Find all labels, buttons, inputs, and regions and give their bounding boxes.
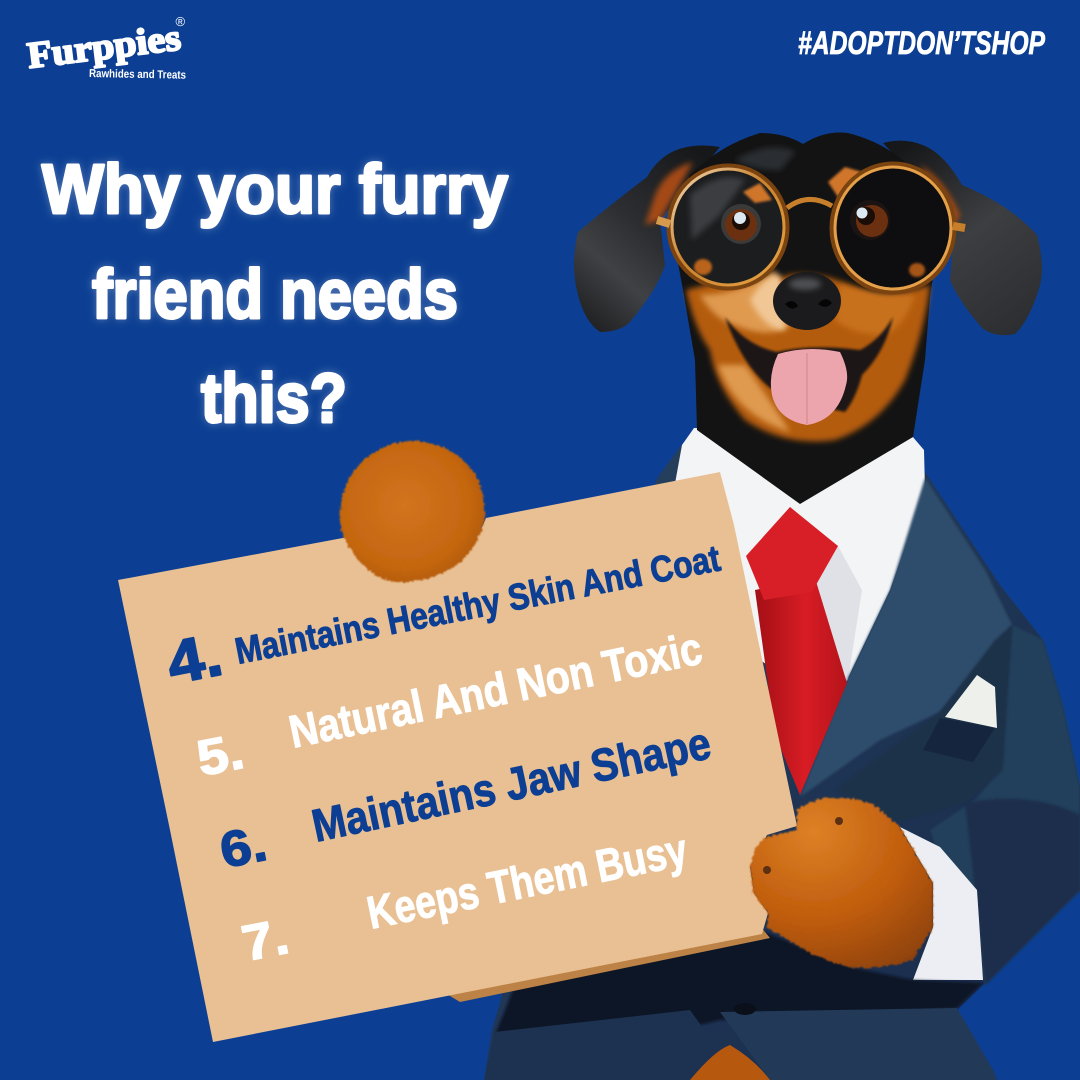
mouth: [725, 317, 893, 412]
jacket lower left panel: [484, 1010, 715, 1080]
title: this?: [201, 359, 347, 437]
eye socket: [721, 204, 761, 244]
right lens lower tan: [909, 263, 925, 277]
left lens lower tan: [694, 259, 712, 275]
item 6: [215, 717, 715, 879]
paw fur: [750, 798, 933, 968]
nostrils: [785, 299, 832, 309]
bright muzzle top: [750, 275, 785, 330]
inner jacket shadow: [835, 625, 1012, 822]
claw dot left: [763, 866, 771, 874]
right lens highlight: [835, 167, 951, 289]
left ear: [574, 145, 720, 332]
jacket hem: [720, 1008, 997, 1080]
light tan left cheek: [700, 270, 790, 432]
item 7 text: Keeps Them Busy: [363, 823, 692, 939]
tail fur: [690, 1045, 770, 1080]
right eye: [850, 200, 890, 240]
tie knot: [746, 507, 838, 600]
breast pocket: [923, 718, 995, 762]
jacket sleeve: [930, 625, 1080, 985]
title: Why your furry: [42, 150, 508, 228]
registered mark: ®: [176, 14, 186, 29]
logo: Furppies: [25, 14, 186, 82]
left temple: [657, 220, 670, 224]
nose: [773, 272, 841, 330]
left paw on sign: [340, 442, 484, 582]
catchlight: [856, 208, 868, 218]
number 5: 5.: [192, 723, 248, 787]
glasses: [657, 165, 965, 291]
sign list: [162, 538, 723, 972]
shirt: [672, 428, 925, 700]
head sheen: [735, 148, 795, 170]
bridge: [787, 199, 832, 208]
right cheek shade: [835, 285, 915, 335]
left lens highlight: [672, 169, 784, 285]
pupil: [732, 212, 750, 230]
tie: [746, 507, 847, 795]
forearm shading: [965, 799, 1080, 985]
pocket square: [945, 675, 997, 728]
iris: [856, 205, 888, 237]
head and neck: [670, 132, 940, 504]
right paw on sign: [750, 798, 933, 968]
item 5 text: Natural And Non Toxic: [284, 622, 706, 758]
tongue: [771, 349, 847, 425]
pupil: [857, 207, 875, 225]
left ear tan patch: [645, 162, 693, 225]
left eye patch grey fur: [690, 177, 745, 240]
right temple: [953, 226, 965, 228]
tan muzzle and chest: [686, 274, 930, 441]
sign board: [118, 472, 797, 1042]
item 6 text: Maintains Jaw Shape: [307, 717, 715, 852]
nose highlight: [789, 278, 821, 290]
right lens rim: [833, 165, 953, 291]
suit jacket: [484, 443, 1080, 1080]
tongue centre line: [806, 353, 808, 424]
shirt cuff: [900, 827, 983, 980]
dog in a suit: [484, 132, 1080, 1080]
catchlight: [734, 212, 746, 224]
title: friend needs: [92, 255, 458, 333]
right eye patch: [836, 168, 950, 288]
right ear tan patch: [920, 165, 960, 225]
right ear: [883, 141, 1042, 335]
shirt collar shadow: [800, 546, 862, 700]
eye socket: [850, 200, 890, 240]
number 7: 7.: [237, 908, 293, 972]
title: [42, 150, 508, 437]
dark lower sleeve band: [495, 930, 983, 1040]
sign edge shadow: [440, 926, 770, 1002]
eyebrow tan marks: [743, 167, 862, 203]
logo wordmark: Furppies: [25, 17, 183, 77]
claw dot top: [835, 817, 843, 825]
tie blade: [755, 578, 847, 795]
item 7: [237, 823, 692, 972]
lapel: [800, 478, 1012, 797]
panel: cardboard sign: [118, 472, 797, 1042]
iris: [725, 209, 757, 241]
number 4: 4.: [162, 621, 227, 697]
left lens rim: [670, 167, 786, 287]
logo tagline: Rawhides and Treats: [89, 68, 186, 82]
item 5: [192, 622, 706, 787]
number 6: 6.: [215, 815, 271, 879]
left eye: [721, 204, 761, 244]
item 4 text: Maintains Healthy Skin And Coat: [232, 538, 723, 672]
item 4: [162, 538, 723, 697]
left eye patch: [672, 170, 784, 286]
jacket button: [734, 1003, 756, 1015]
